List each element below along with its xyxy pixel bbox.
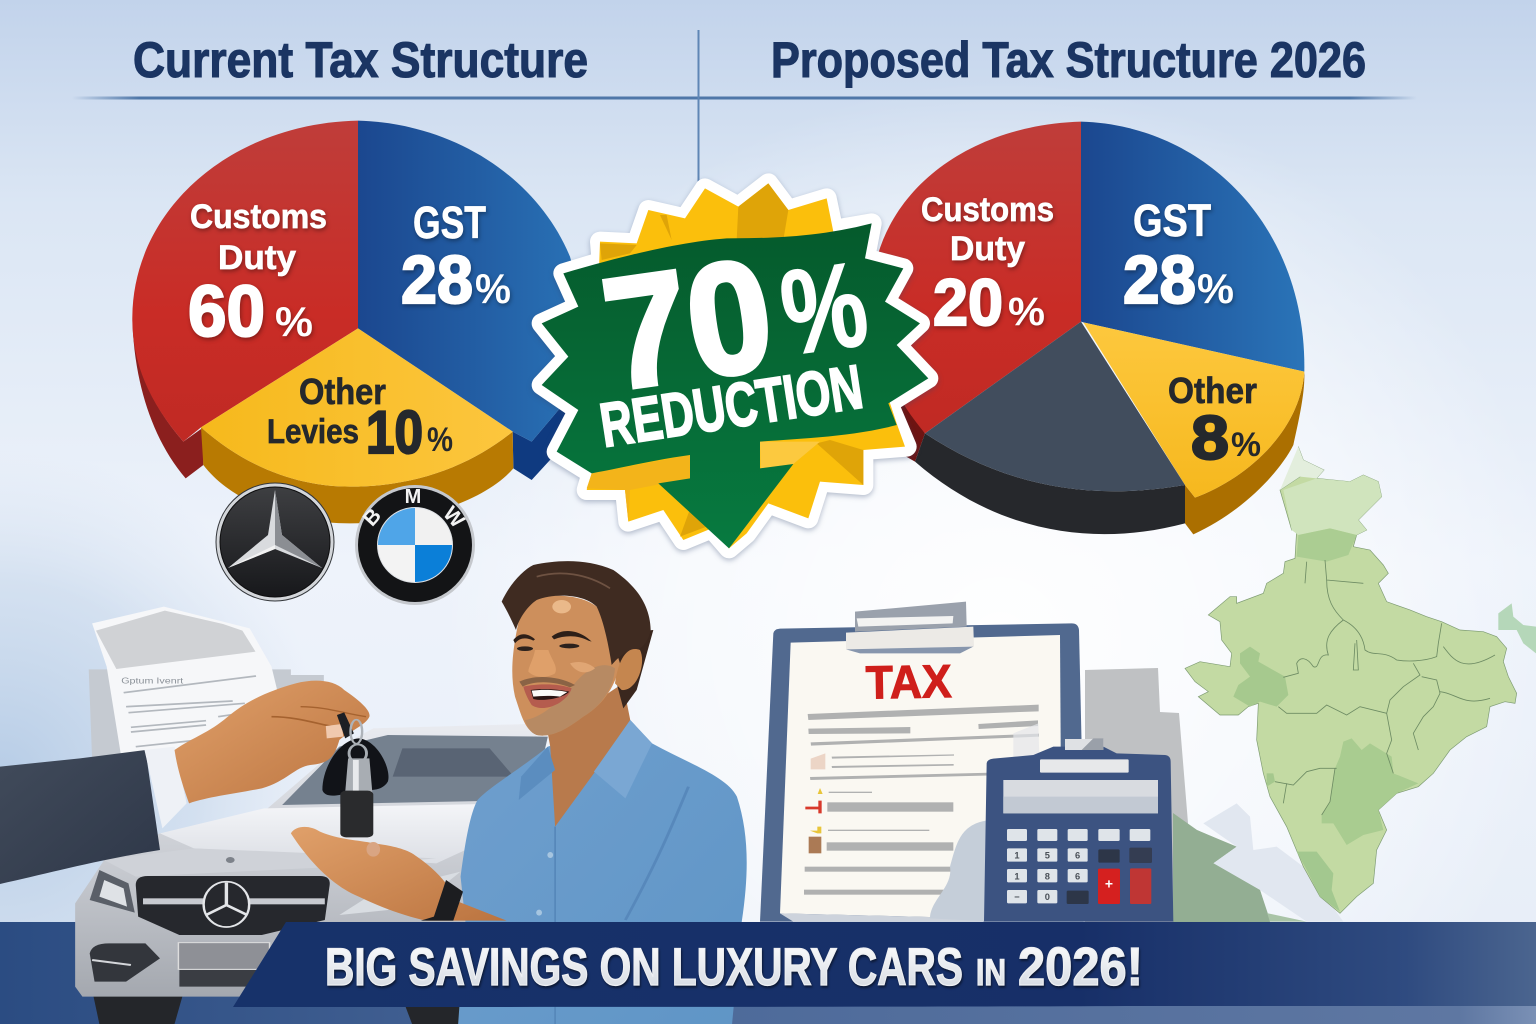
pie chart: current tax structure [132,121,593,523]
grille [136,876,330,935]
label: customs duty 60%: Duty [218,239,296,277]
banner text: 2026! [1018,937,1143,997]
mouth [523,684,572,708]
label: gst 28% [1123,195,1234,318]
label: customs duty 20%: 20 [933,265,1003,339]
calculator [984,738,1173,922]
divider lines [72,30,1417,190]
form lines [804,705,1039,895]
wristwatch [421,880,463,921]
license plate [178,943,270,969]
headlights [90,870,135,913]
shirt cuff [144,747,187,828]
70% text [594,213,878,423]
label: customs duty 60%: % [275,298,313,345]
icon: bmw logo: M [405,486,421,508]
label: gst 28%: % [475,265,511,312]
label: customs duty 20%: Customs [921,191,1054,229]
icon: bmw logo: B [359,504,386,531]
label: customs duty 60%: Customs [190,198,327,236]
green map shadow [1173,813,1270,922]
car key [322,712,389,837]
clipboard clip [846,602,974,653]
bottom background band [0,922,1536,1024]
hand [175,681,370,803]
gold starburst [587,183,905,548]
label: customs duty 20%: % [1008,290,1045,334]
label: customs duty 60% [188,198,327,352]
label: customs duty 20% [921,191,1054,339]
label: other levies 10%: 10 [366,399,423,466]
label: other levies 10%: % [427,421,453,459]
bumper [90,943,160,982]
label: customs duty 60%: 60 [188,272,265,352]
green starburst [542,223,928,548]
ear [615,649,642,690]
label: other levies 10% [267,371,453,466]
man: head [502,561,653,736]
ribbon banner [233,922,1536,1007]
calculator keys: 6 [1075,851,1080,861]
banner text: IN [976,952,1006,993]
india map [1170,447,1536,922]
70% text: % [773,236,875,381]
icon: bmw logo [355,485,475,605]
tires [92,990,184,1024]
clipboard with tax form [760,602,1083,922]
label: gst 28%: % [1197,265,1234,312]
banner text: BIG SAVINGS ON LUXURY CARS [325,938,963,997]
reduction text: REDUCTION [596,353,867,461]
calculator keys: 0 [1045,892,1050,902]
label: customs duty 20%: Duty [950,230,1025,268]
label: other 8%: % [1231,426,1261,464]
calculator keys: + [1105,876,1113,892]
paper document behind hand [89,607,324,760]
label: other 8%: 8 [1191,404,1229,473]
calculator keys: 1 [1014,871,1020,881]
calculator keys [1007,829,1152,904]
label: gst 28%: 28 [401,242,473,318]
white sticker outline [542,183,928,548]
70% text: 70 [594,226,783,423]
label: other levies 10%: Levies [267,413,359,451]
eyes [517,646,533,651]
label: gst 28%: GST [413,197,486,248]
badge: 70% reduction [542,183,928,548]
calculator keys: − [1014,892,1020,902]
gray document behind calculator [1085,668,1188,922]
car body [75,724,582,997]
heading: current tax structure: Current Tax Structure [133,32,588,88]
calculator keys: 5 [1045,851,1050,861]
label: other 8%: Other [1168,370,1257,411]
pie chart: proposed tax structure [872,122,1304,534]
luxury car [75,724,582,1024]
icon: bmw logo: W [438,502,469,533]
label: gst 28%: GST [1133,195,1211,246]
calculator keys: 6 [1075,871,1080,881]
hood star badge [204,882,249,927]
calculator keys: 8 [1045,871,1050,881]
hand giving keys [0,681,370,884]
suit sleeve [0,750,160,884]
icon: mercedes logo [216,483,334,601]
tax heading: TAX [865,655,952,709]
man: body [458,683,747,1024]
paper document behind hand: Gptum Ivenrt [121,676,183,686]
label: gst 28% [401,197,511,318]
eyebrows [513,634,535,643]
calculator keys: 1 [1014,851,1020,861]
label: other 8% [1168,370,1261,473]
label: other levies 10%: Other [299,371,386,412]
hair [502,561,651,665]
heading: proposed tax structure: Proposed Tax Structure 2026 [771,32,1366,88]
label: gst 28%: 28 [1123,242,1196,318]
receiving hand [291,827,507,921]
